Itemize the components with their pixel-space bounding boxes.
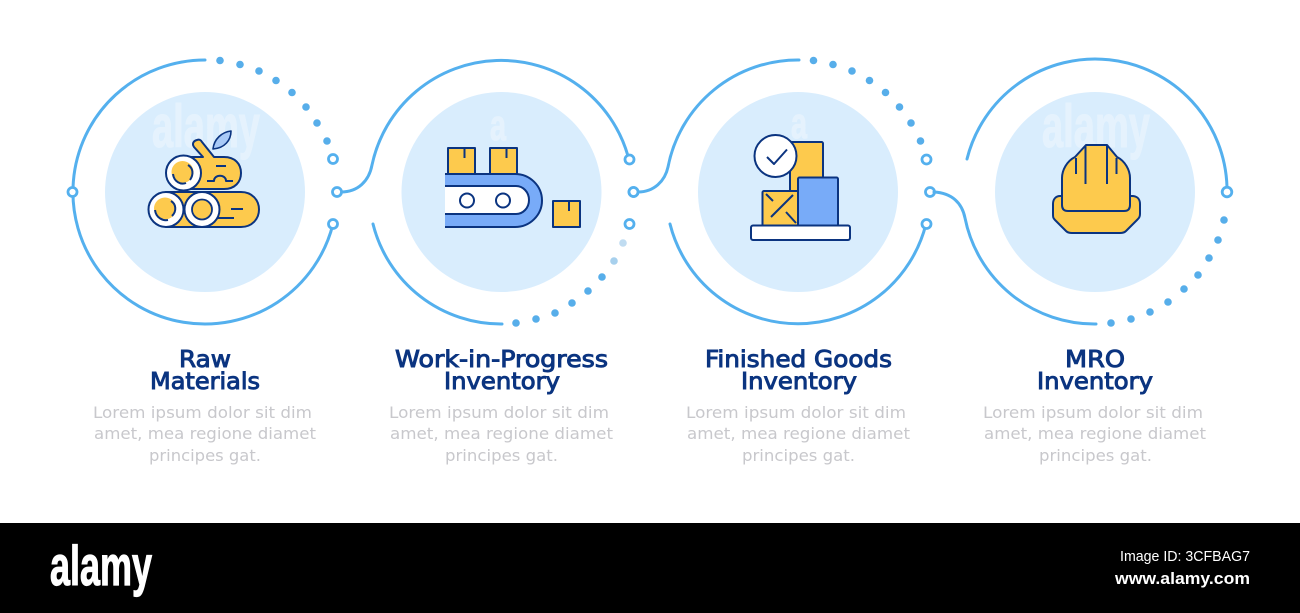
heading: MRO: Inventory <box>1037 369 1153 395</box>
ring arc: MRO lower <box>934 192 1096 324</box>
ring arc: finished goods upper <box>638 60 799 192</box>
ring node: MRO <box>1222 187 1232 197</box>
ring arc: work-in-progress upper <box>341 60 628 192</box>
body text: raw materials: amet, mea regione diamet <box>94 424 316 443</box>
icon: hard hat <box>1053 145 1140 233</box>
footer logo: alamy <box>50 534 152 597</box>
ring dots: finished goods <box>810 57 924 145</box>
watermark: letter a third: a <box>791 99 807 148</box>
ring dots: work-in-progress <box>512 239 627 327</box>
website: www.alamy.com <box>1114 569 1250 588</box>
watermark: letter a second: a <box>490 101 506 150</box>
ring arc: finished goods lower <box>670 224 926 324</box>
panel: raw materials step <box>68 57 338 465</box>
icon: conveyor belt with boxes <box>445 148 580 227</box>
panel: work-in-progress step <box>332 60 638 465</box>
heading: MRO: MRO <box>1065 347 1125 373</box>
watermark: alamy right: alamy <box>1042 93 1150 160</box>
ring nodes: finished goods <box>629 155 934 228</box>
body text: work-in-progress: principes gat. <box>445 446 558 465</box>
body text: finished goods: Lorem ipsum dolor sit dim <box>686 403 906 422</box>
inner disc: MRO <box>995 92 1195 292</box>
heading: raw materials: Materials <box>150 369 260 395</box>
watermark: alamy left: alamy <box>152 93 260 160</box>
body text: finished goods: amet, mea regione diamet <box>687 424 910 443</box>
body text: work-in-progress: amet, mea regione diamet <box>390 424 613 443</box>
inner disc: raw materials <box>105 92 305 292</box>
ring arc: MRO upper <box>967 59 1227 187</box>
body text: MRO: principes gat. <box>1039 446 1152 465</box>
panel: MRO step <box>934 59 1232 465</box>
heading: raw materials: Raw <box>179 347 231 373</box>
ring nodes: raw materials <box>68 154 338 228</box>
inner disc: work-in-progress <box>402 92 602 292</box>
panel: finished goods step <box>629 57 934 465</box>
body text: MRO: Lorem ipsum dolor sit dim <box>983 403 1203 422</box>
body text: work-in-progress: Lorem ipsum dolor sit dim <box>389 403 609 422</box>
icon: finished boxes with check mark <box>751 135 850 240</box>
ring arc: raw materials <box>73 60 333 324</box>
ring arc: work-in-progress lower <box>373 224 502 324</box>
heading: work-in-progress: Inventory <box>444 369 560 395</box>
body text: raw materials: Lorem ipsum dolor sit dim <box>93 403 312 422</box>
heading: finished goods: Finished Goods <box>705 347 892 373</box>
inner disc: finished goods <box>698 92 898 292</box>
footer bar <box>0 523 1300 613</box>
ring dots: raw materials <box>216 57 331 145</box>
body text: finished goods: principes gat. <box>742 446 855 465</box>
ring dots: MRO <box>1107 216 1228 327</box>
heading: finished goods: Inventory <box>741 369 857 395</box>
icon: stacked logs <box>148 131 259 227</box>
ring nodes: work-in-progress <box>332 155 638 228</box>
body text: MRO: amet, mea regione diamet <box>984 424 1206 443</box>
heading: work-in-progress: Work-in-Progress <box>395 347 608 373</box>
body text: raw materials: principes gat. <box>149 446 261 465</box>
image id: Image ID: 3CFBAG7 <box>1120 548 1250 565</box>
